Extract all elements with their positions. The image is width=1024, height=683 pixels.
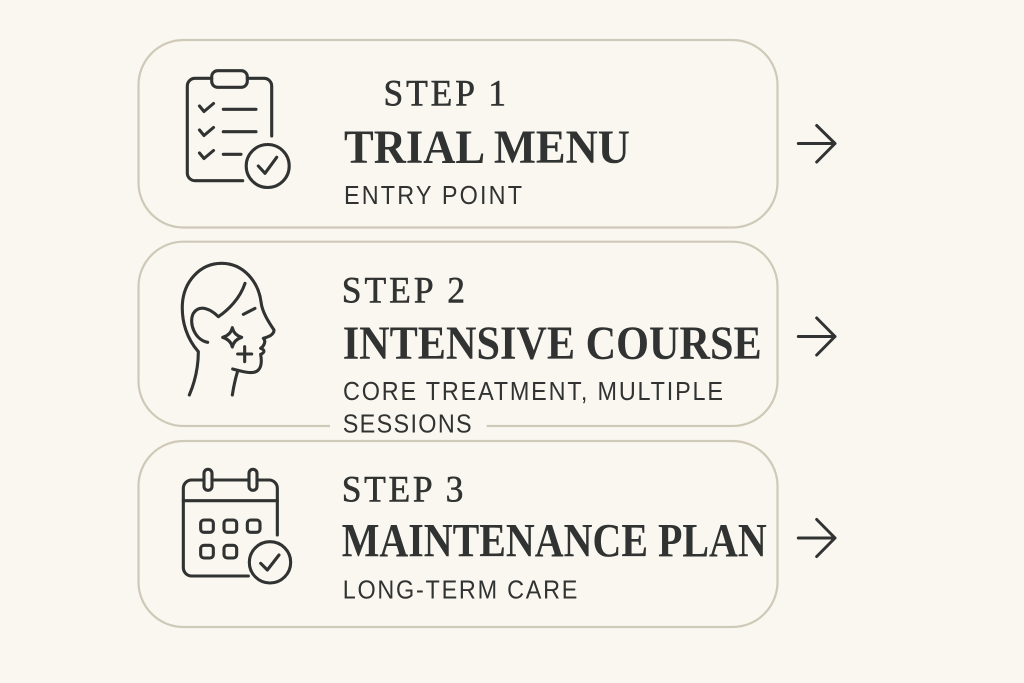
icon: face profile with sparkles <box>182 263 274 395</box>
step title: MAINTENANCE PLAN <box>342 515 767 568</box>
step title: INTENSIVE COURSE <box>343 317 762 370</box>
step description: CORE TREATMENT, MULTIPLE <box>343 378 723 406</box>
step description: LONG-TERM CARE <box>343 576 577 605</box>
icon: clipboard checklist <box>187 71 289 188</box>
step title: TRIAL MENU <box>344 121 630 174</box>
step description: ENTRY POINT <box>344 182 522 210</box>
panel: step 1 trial menu <box>138 40 778 228</box>
arrow: step 3 <box>798 520 835 556</box>
step label: STEP 3 <box>342 469 463 510</box>
icon: calendar with check <box>183 469 291 583</box>
panel: step 3 maintenance plan <box>138 441 778 627</box>
arrow: step 2 <box>798 318 835 355</box>
step description second line: SESSIONS <box>343 411 472 439</box>
card outline: step 3 <box>138 441 778 627</box>
step label: STEP 2 <box>342 270 465 311</box>
arrow: step 1 <box>798 126 835 162</box>
step label: STEP 1 <box>384 73 506 114</box>
card outline: step 2 with gap <box>138 242 778 426</box>
panel: step 2 intensive course <box>138 242 778 439</box>
card outline: step 1 <box>138 40 778 228</box>
